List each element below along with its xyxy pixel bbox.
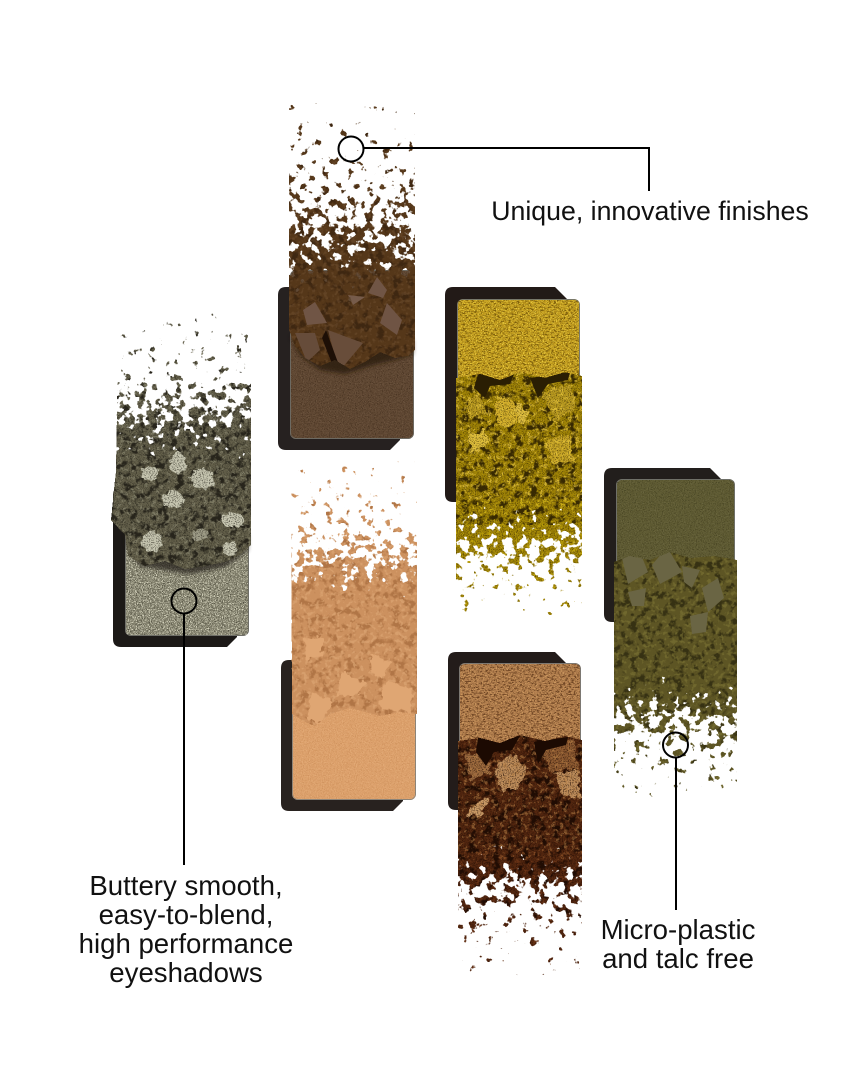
pile shadow	[291, 335, 413, 374]
light flakes	[141, 453, 245, 556]
label: eyeshadows	[109, 957, 263, 988]
pan	[457, 299, 580, 380]
callout: micro-plastic free	[601, 732, 756, 974]
crumbled powder	[454, 730, 586, 980]
swatch: tan matte eyeshadow	[281, 455, 420, 811]
pan shadow	[278, 287, 400, 450]
pan shadow	[604, 468, 722, 622]
pan	[125, 470, 249, 636]
callout: buttery smooth	[79, 588, 293, 988]
label: Micro-plastic	[601, 914, 756, 945]
dark cracks	[476, 736, 568, 766]
pan shadow	[445, 287, 567, 502]
label: Unique, innovative finishes	[491, 196, 809, 226]
pile shadow	[126, 535, 248, 574]
label: and talc free	[602, 943, 754, 974]
pan shadow	[448, 652, 566, 810]
leader line	[675, 758, 677, 910]
leader line	[364, 148, 649, 191]
swatch: metallic gold eyeshadow	[445, 287, 586, 617]
pressed chunks	[622, 547, 724, 634]
pan shadow	[113, 487, 237, 647]
pressed chunks	[465, 384, 576, 465]
crumbled powder	[285, 100, 420, 375]
label: easy-to-blend,	[99, 899, 273, 930]
leader line	[183, 614, 185, 865]
marker ring	[663, 732, 688, 758]
swatch: silver shimmer eyeshadow	[108, 310, 254, 647]
marker ring	[338, 136, 364, 162]
pan	[616, 479, 735, 561]
dark cracks	[474, 372, 570, 398]
label: high performance	[79, 928, 293, 959]
crumbled powder	[452, 365, 586, 617]
pan	[290, 270, 414, 439]
pressed chunks	[466, 740, 580, 816]
pan	[292, 708, 416, 800]
callout: unique finishes	[338, 136, 809, 226]
crumbled powder	[108, 310, 254, 572]
swatch: copper shimmer eyeshadow	[448, 652, 586, 980]
crumbled powder	[610, 547, 740, 800]
crumbled powder	[288, 455, 420, 730]
marker ring	[172, 588, 196, 614]
pan	[459, 663, 581, 743]
swatch: dark brown eyeshadow	[278, 100, 420, 450]
swatch: olive matte eyeshadow	[604, 468, 740, 800]
pressed chunks	[295, 277, 402, 369]
pressed chunks	[305, 636, 412, 726]
label: Buttery smooth,	[89, 870, 283, 901]
pan shadow	[281, 660, 403, 811]
